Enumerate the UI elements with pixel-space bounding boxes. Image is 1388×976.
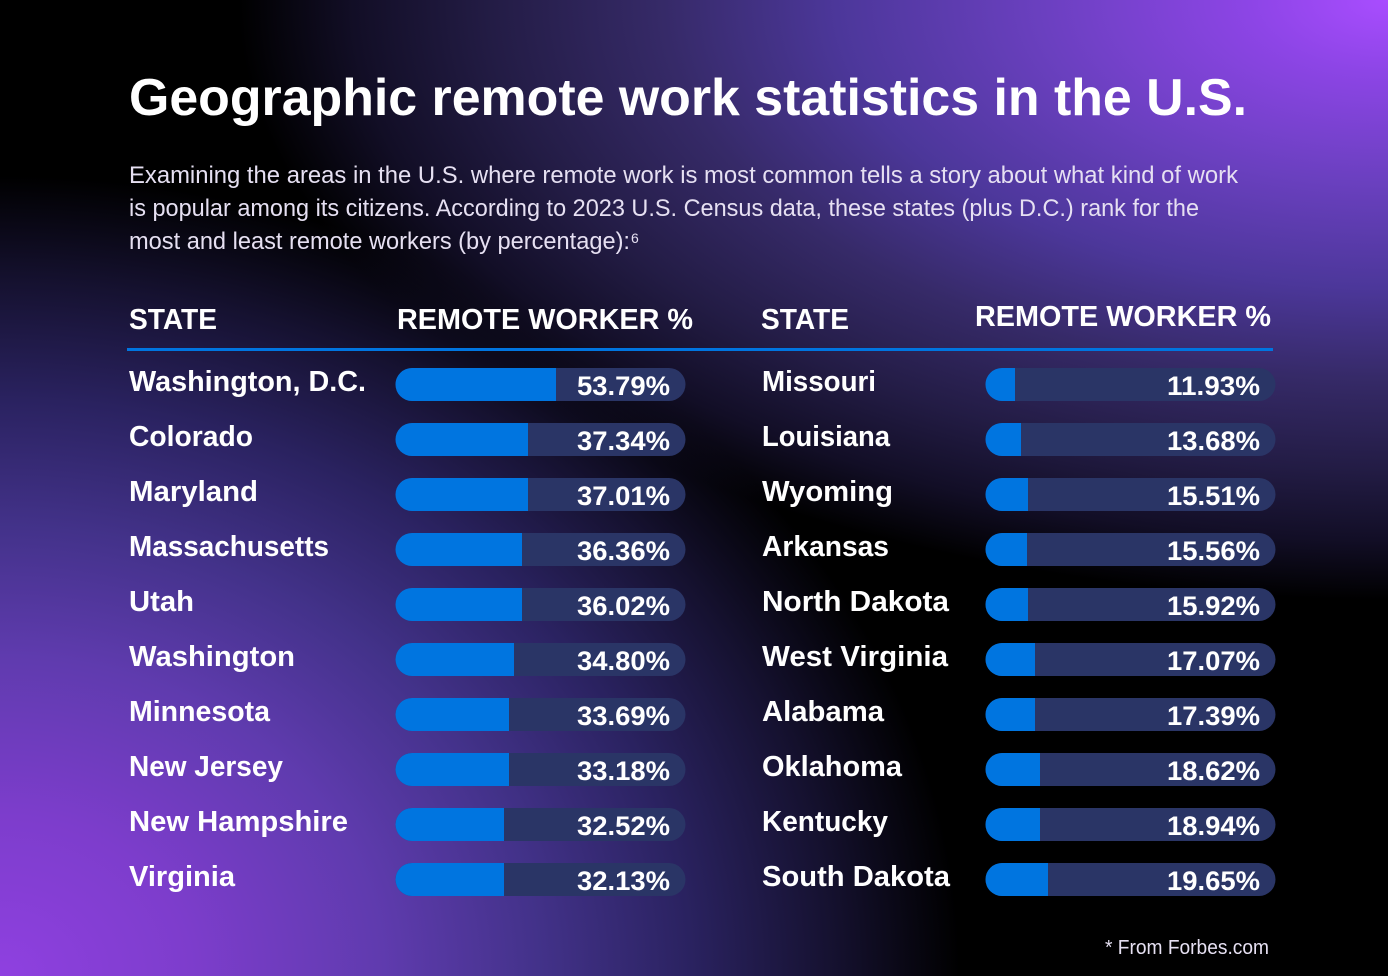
row: Massachusetts: Massachusetts bbox=[129, 531, 329, 563]
intro paragraph: 6 bbox=[631, 230, 639, 246]
intro paragraph: Examining the areas in the U.S. where remote work is most common tells a story about what kind of work bbox=[129, 162, 1239, 189]
row: Colorado: Colorado bbox=[129, 421, 253, 453]
row: Virginia: 32.13% bbox=[577, 866, 670, 896]
row: New Jersey: New Jersey bbox=[129, 751, 283, 783]
row: Utah bbox=[129, 586, 686, 621]
row: Louisiana: Louisiana bbox=[762, 421, 891, 453]
row: South Dakota: South Dakota bbox=[762, 861, 951, 893]
row: New Hampshire: 32.52% bbox=[577, 811, 670, 841]
row: Arkansas: Arkansas bbox=[762, 531, 889, 563]
row: Minnesota bbox=[129, 696, 686, 731]
row: North Dakota: North Dakota bbox=[762, 586, 950, 618]
row: Massachusetts bbox=[129, 531, 686, 566]
row: Massachusetts: 36.36% bbox=[577, 536, 670, 566]
row: Washington, D.C.: 53.79% bbox=[577, 371, 670, 401]
row: Alabama: Alabama bbox=[762, 696, 885, 728]
row: Missouri: Missouri bbox=[762, 366, 876, 398]
row: North Dakota bbox=[762, 586, 1276, 621]
row: New Jersey bbox=[129, 751, 686, 786]
row: South Dakota bbox=[762, 861, 1276, 896]
row: Minnesota: Minnesota bbox=[129, 696, 271, 728]
row: Missouri bbox=[762, 366, 1276, 401]
row: West Virginia: 17.07% bbox=[1167, 646, 1260, 676]
row: South Dakota: 19.65% bbox=[1167, 866, 1260, 896]
row: New Jersey: 33.18% bbox=[577, 756, 670, 786]
row: Colorado bbox=[129, 421, 686, 456]
row: Alabama bbox=[762, 696, 1276, 731]
row: Wyoming bbox=[762, 476, 1276, 511]
row: Minnesota: 33.69% bbox=[577, 701, 670, 731]
row: Oklahoma: 18.62% bbox=[1167, 756, 1260, 786]
row: Virginia bbox=[129, 861, 686, 896]
row: Oklahoma: Oklahoma bbox=[762, 751, 903, 783]
row: Colorado: 37.34% bbox=[577, 426, 670, 456]
row: New Hampshire bbox=[129, 806, 686, 841]
row: Missouri: 11.93% bbox=[1167, 371, 1260, 401]
intro paragraph bbox=[129, 162, 1239, 255]
row: Wyoming: Wyoming bbox=[762, 476, 893, 508]
title: Geographic remote work statistics in the U.S. bbox=[129, 69, 1247, 127]
table header: right percentage column: REMOTE WORKER % bbox=[975, 301, 1271, 333]
row: Kentucky bbox=[762, 806, 1276, 841]
row: Maryland: 37.01% bbox=[577, 481, 670, 511]
row: Kentucky: 18.94% bbox=[1167, 811, 1260, 841]
row: North Dakota: 15.92% bbox=[1167, 591, 1260, 621]
row: Utah: Utah bbox=[129, 586, 194, 618]
table header: left percentage column: REMOTE WORKER % bbox=[397, 304, 693, 336]
row: New Hampshire: New Hampshire bbox=[129, 806, 348, 838]
row: Louisiana: 13.68% bbox=[1167, 426, 1260, 456]
source note: * From Forbes.com bbox=[1105, 937, 1269, 959]
table header: left state column: STATE bbox=[129, 304, 217, 336]
row: Maryland: Maryland bbox=[129, 476, 258, 508]
row: West Virginia: West Virginia bbox=[762, 641, 949, 673]
row: Arkansas bbox=[762, 531, 1276, 566]
row: Virginia: Virginia bbox=[129, 861, 236, 893]
row: Washington, D.C.: Washington, D.C. bbox=[129, 366, 366, 398]
row: Oklahoma bbox=[762, 751, 1276, 786]
row: Wyoming: 15.51% bbox=[1167, 481, 1260, 511]
row: Alabama: 17.39% bbox=[1167, 701, 1260, 731]
row: Arkansas: 15.56% bbox=[1167, 536, 1260, 566]
row: Washington: Washington bbox=[129, 641, 295, 673]
row: Washington, D.C. bbox=[129, 366, 686, 401]
row: Washington bbox=[129, 641, 686, 676]
row: West Virginia bbox=[762, 641, 1276, 676]
row: Washington: 34.80% bbox=[577, 646, 670, 676]
intro paragraph: is popular among its citizens. According to 2023 U.S. Census data, these states (plus D.C.) rank for the bbox=[129, 195, 1199, 222]
row: Utah: 36.02% bbox=[577, 591, 670, 621]
row: Kentucky: Kentucky bbox=[762, 806, 888, 838]
row: Maryland bbox=[129, 476, 686, 511]
intro paragraph: most and least remote workers (by percentage): bbox=[129, 228, 630, 255]
right column: states with fewest remote workers bbox=[762, 366, 1276, 896]
row: Louisiana bbox=[762, 421, 1276, 456]
left column: states with most remote workers bbox=[129, 366, 686, 896]
table header: right state column: STATE bbox=[761, 304, 849, 336]
